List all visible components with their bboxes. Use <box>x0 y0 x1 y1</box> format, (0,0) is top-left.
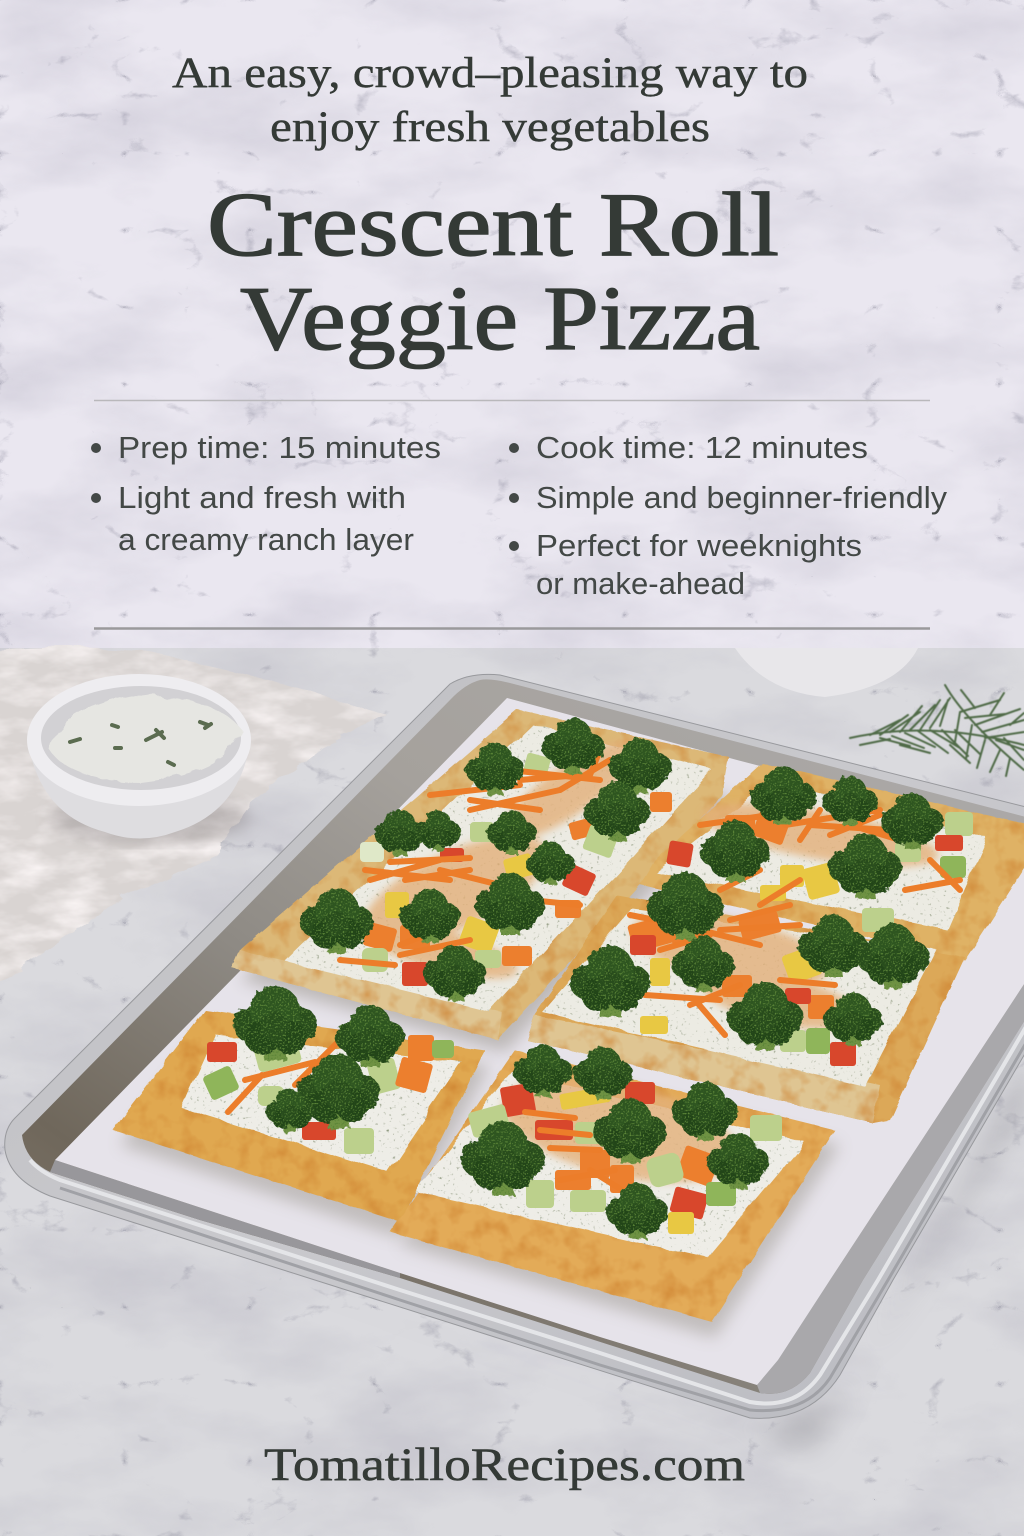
colour base under the toppings <box>348 724 942 1202</box>
pizza slice: middle right <box>527 895 965 1123</box>
pizza slice: upper right <box>640 763 1024 960</box>
small bowl, top right <box>735 648 918 697</box>
pizza slice: lower right <box>390 1050 840 1338</box>
bullet list: left column <box>91 430 441 557</box>
vegetable toppings <box>202 724 973 1234</box>
title: Crescent Roll <box>207 174 779 275</box>
bullet list: left column: a creamy ranch layer <box>118 522 414 557</box>
subtitle: enjoy fresh vegetables <box>270 104 710 151</box>
pizza slice: upper left <box>232 710 735 1052</box>
broccoli florets <box>233 718 944 1239</box>
bullet list: left column: Light and fresh with <box>118 480 406 515</box>
pizza slice: lower left <box>113 1010 490 1238</box>
bullet list: right column: or make-ahead <box>536 566 745 601</box>
title <box>207 174 779 369</box>
bullet list: left column: Prep time: 15 minutes <box>118 430 441 465</box>
bullet list: right column: Perfect for weeknights <box>536 528 862 563</box>
subtitle <box>172 50 808 151</box>
bowl of ranch dip <box>27 674 251 844</box>
baking tray <box>5 674 1024 1450</box>
title: Veggie Pizza <box>240 268 760 369</box>
dill sprig <box>850 685 1024 776</box>
bullet list: right column: Cook time: 12 minutes <box>536 430 868 465</box>
napkin <box>0 648 388 990</box>
subtitle: An easy, crowd–pleasing way to <box>172 50 808 97</box>
bullet list: right column <box>509 430 948 601</box>
footer website: TomatilloRecipes.com <box>264 1439 745 1491</box>
bullet list: right column: Simple and beginner-friendly <box>536 480 948 515</box>
